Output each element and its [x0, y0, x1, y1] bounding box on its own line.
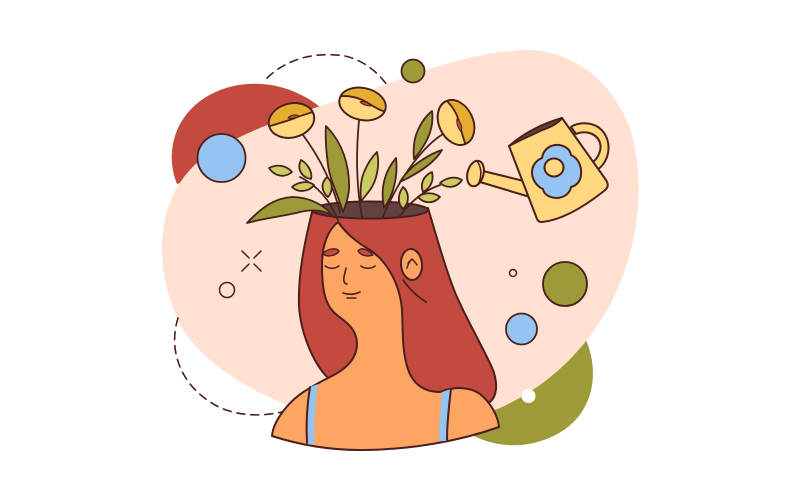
can flower centre	[544, 158, 564, 176]
circle: olive large	[543, 262, 587, 306]
eyes closed	[325, 266, 375, 268]
circle: blue right	[506, 314, 537, 344]
circle: white	[522, 389, 536, 403]
stems	[300, 121, 443, 220]
watering can	[464, 118, 609, 222]
sprinkler head	[464, 159, 487, 188]
pale leaf centre	[361, 152, 378, 201]
circle: olive small	[402, 60, 424, 82]
hair lock	[403, 280, 426, 302]
olive leaf upper right	[414, 111, 432, 159]
right strap	[439, 389, 451, 441]
ear	[400, 248, 423, 281]
woman figure	[272, 202, 499, 450]
tall olive leaf left	[326, 126, 349, 212]
circle: blue top left	[198, 134, 246, 182]
red background blob	[172, 84, 326, 184]
handle	[571, 123, 609, 170]
hole in head	[312, 202, 428, 218]
circle: small left	[220, 282, 234, 298]
olive leaf lower right	[400, 150, 442, 182]
plant	[247, 80, 490, 223]
right eyelid	[358, 249, 373, 256]
mouth	[343, 292, 360, 298]
left strap	[307, 384, 318, 445]
small leaves right	[399, 172, 462, 209]
flower centre	[338, 86, 387, 122]
peach background blob	[162, 50, 639, 424]
flower right	[436, 99, 476, 146]
left eyelid	[323, 249, 339, 256]
ear detail	[407, 259, 417, 268]
can flower	[532, 145, 581, 198]
can body	[509, 118, 608, 222]
can opening	[509, 118, 562, 146]
spout	[480, 171, 530, 197]
olive leaf mid	[383, 158, 396, 208]
hair back	[299, 208, 496, 402]
olive background blob	[463, 340, 593, 445]
dashed arc top	[267, 55, 387, 85]
flower left	[268, 102, 316, 139]
dashed arc left	[175, 318, 282, 415]
illustration	[162, 50, 639, 451]
body and face	[272, 222, 499, 450]
nose	[344, 268, 347, 284]
small leaves left	[269, 160, 332, 197]
circle: tiny right	[510, 270, 516, 276]
big lower left leaf	[247, 197, 332, 223]
sparkle cross	[242, 251, 261, 271]
